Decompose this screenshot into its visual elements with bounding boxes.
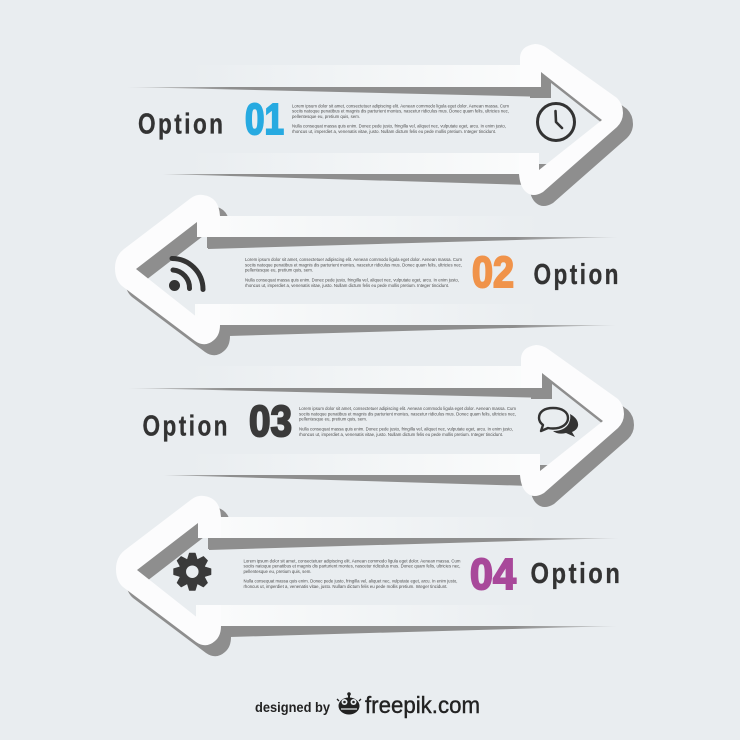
arrow 3 number: 03 — [249, 397, 292, 446]
arrow 1 lower shadow wedge — [163, 174, 530, 185]
arrow 4 lower shadow wedge — [221, 626, 617, 637]
arrow 2 title: Option — [534, 257, 619, 291]
arrow 3 body text — [299, 406, 516, 437]
icon: rss feed — [169, 258, 203, 291]
arrow 3 bottom band — [191, 454, 531, 475]
arrow 2 white head — [115, 195, 220, 344]
arrow 2 number: 02 — [472, 248, 514, 297]
arrow 3 body text: rhoncus ut, imperdiet a, venenatis vitae, justo. Nullam dictum felis eu pede mollis pretium. Integer tincidunt. — [299, 432, 503, 437]
arrow 2 body text: rhoncus ut, imperdiet a, venenatis vitae, justo. Nullam dictum felis eu pede mollis pretium. Integer tincidunt. — [245, 283, 449, 288]
arrow 1: option 01, pointing right — [127, 44, 633, 206]
arrow 1 bottom band — [190, 153, 530, 174]
arrow 4 body text: rhoncus ut, imperdiet a, venenatis vitae, justo. Nullam dictum felis eu pede mollis pretium. Integer tincidunt. — [244, 584, 448, 589]
arrow 1 inner notch — [539, 164, 544, 169]
arrow 2 bottom band — [195, 304, 545, 325]
arrow 1 drop shadow — [529, 55, 633, 206]
arrow 1 body text: Nulla consequat massa quis enim. Donec pede justo, fringilla vel, aliquet nec, vulputate eget, arcu. In enim justo, — [292, 124, 506, 129]
arrow 2 lower shadow wedge — [220, 325, 616, 336]
arrow 2 body text: sociis natoque penatibus et magnis dis parturient montes, nascetur ridiculus mus. Donec quam felis, ultricies nec, — [245, 262, 462, 267]
arrow 4 body text: Lorem ipsum dolor sit amet, consectetuer adipiscing elit. Aenean commodo ligula eget dolor. Aenean massa. Cum — [244, 558, 461, 563]
arrow 1 body text: pellentesque eu, pretium quis, sem. — [292, 114, 360, 119]
arrow 2 body text: Nulla consequat massa quis enim. Donec pede justo, fringilla vel, aliquet nec, vulputate eget, arcu. In enim justo, — [245, 278, 459, 283]
arrow 3 body text: Nulla consequat massa quis enim. Donec pede justo, fringilla vel, aliquet nec, vulputate eget, arcu. In enim justo, — [299, 427, 513, 432]
arrow 2 drop shadow — [125, 206, 230, 355]
arrow 1 number: 01 — [245, 95, 284, 144]
freepik.com wordmark: freepik.com — [365, 692, 480, 718]
arrow 3 inner notch — [540, 465, 545, 470]
arrow 2: option 02, pointing left — [115, 195, 619, 355]
arrow 4 drop shadow — [126, 507, 231, 656]
arrow 4 title: Option — [530, 557, 620, 590]
arrow 4 upper shadow wedge — [209, 538, 619, 550]
arrow 4 body text: Nulla consequat massa quis enim. Donec pede justo, fringilla vel, aliquet nec, vulputate eget, arcu. In enim justo, — [244, 579, 458, 584]
arrow 1 body text: Lorem ipsum dolor sit amet, consectetuer adipiscing elit. Aenean commodo ligula eget dolor. Aenean massa. Cum — [292, 103, 509, 108]
arrow 3 top band — [191, 366, 523, 388]
arrow 4 bottom band — [196, 605, 546, 626]
arrow 3 drop shadow — [530, 356, 634, 507]
arrow 3 body text: pellentesque eu, pretium quis, sem. — [299, 417, 367, 422]
arrow 4 body text: sociis natoque penatibus et magnis dis parturient montes, nascetur ridiculus mus. Donec quam felis, ultricies nec, — [244, 564, 460, 569]
arrow 1 body text: rhoncus ut, imperdiet a, venenatis vitae, justo. Nullam dictum felis eu pede mollis pretium. Integer tincidunt. — [292, 129, 496, 134]
arrow 1 body text — [292, 103, 509, 134]
footer credit — [255, 692, 480, 718]
arrow 4 number: 04 — [470, 550, 516, 599]
arrow 3: option 03, pointing right — [128, 345, 634, 507]
arrow 4: option 04, pointing left — [116, 496, 620, 656]
arrow 3 body text: Lorem ipsum dolor sit amet, consectetuer adipiscing elit. Aenean commodo ligula eget dolor. Aenean massa. Cum — [299, 406, 516, 411]
designed by label: designed by — [255, 700, 330, 715]
arrow 2 top band — [215, 216, 545, 237]
icon: clock — [538, 104, 574, 140]
arrow 1 title: Option — [138, 107, 223, 140]
arrow 3 lower shadow wedge — [164, 475, 531, 486]
arrow 1 white head — [519, 44, 623, 195]
arrow 1 top band — [190, 65, 522, 87]
icon: freepik mascot — [337, 692, 361, 714]
arrow 2 body text: Lorem ipsum dolor sit amet, consectetuer adipiscing elit. Aenean commodo ligula eget dolor. Aenean massa. Cum — [245, 257, 462, 262]
arrow 3 body text: sociis natoque penatibus et magnis dis parturient montes, nascetur ridiculus mus. Donec quam felis, ultricies nec, — [299, 411, 516, 416]
arrow 4 white head — [116, 496, 221, 645]
arrow 2 body text — [245, 257, 462, 288]
arrow 4 top band — [216, 517, 546, 538]
arrow 3 white head — [520, 345, 624, 496]
arrow 2 body text: pellentesque eu, pretium quis, sem. — [245, 268, 313, 273]
arrow 1 upper shadow wedge — [127, 87, 550, 97]
arrow 4 body text — [244, 558, 461, 589]
arrow 3 upper shadow wedge — [128, 388, 551, 398]
arrow 1 body text: sociis natoque penatibus et magnis dis parturient montes, nascetur ridiculus mus. Donec quam felis, ultricies nec, — [292, 109, 509, 114]
arrow 4 body text: pellentesque eu, pretium quis, sem. — [244, 569, 312, 574]
arrow 2 upper shadow wedge — [208, 237, 618, 249]
arrow 3 title: Option — [142, 409, 228, 442]
icon: speech bubbles — [539, 408, 578, 437]
icon: gear — [174, 553, 211, 590]
